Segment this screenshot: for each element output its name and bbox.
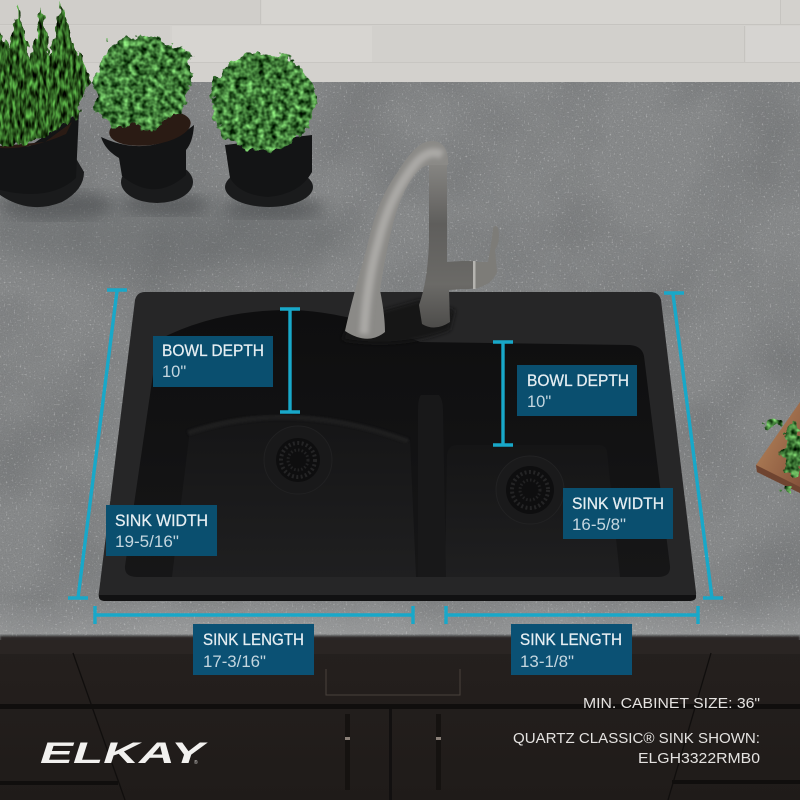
callout: right sink length: 13-1/8" (520, 653, 574, 671)
spout highlight (364, 153, 442, 334)
potted plant 3: round ivy (211, 53, 325, 218)
dimension: left bowl depth (280, 309, 300, 412)
callout: left sink length: SINK LENGTH (203, 631, 304, 649)
rosemary foliage (0, 2, 90, 146)
callout: left bowl depth: 10" (162, 363, 186, 381)
pot body (225, 135, 312, 197)
pot shadow (225, 198, 325, 218)
potted plant 2: herb (94, 34, 210, 215)
logo: Elkay: ® (194, 759, 198, 766)
logo: Elkay: ELKAY (40, 737, 209, 770)
right bowl floor (445, 445, 620, 577)
callout: right sink length: SINK LENGTH (520, 631, 622, 649)
faucet collar (473, 261, 476, 289)
ivy foliage (211, 53, 315, 151)
cabinet door handles (345, 714, 441, 790)
dimension: left sink length (95, 606, 413, 624)
soil (107, 105, 193, 151)
pot body (101, 125, 194, 189)
faucet body and neck (419, 155, 490, 328)
callout: right sink width: SINK WIDTH (572, 495, 664, 513)
note: product shown (513, 730, 760, 767)
note: product shown: QUARTZ CLASSIC® SINK SHOWN: (513, 730, 760, 747)
dimension: right sink length (446, 606, 698, 624)
callout: right bowl depth (517, 365, 637, 416)
logo: Elkay (40, 737, 209, 770)
pot shadow (120, 195, 210, 215)
left drain (264, 426, 332, 494)
callout: left bowl depth: BOWL DEPTH (162, 342, 264, 360)
dark cabinets (0, 640, 800, 800)
callout: left sink width: SINK WIDTH (115, 512, 208, 530)
callout: left bowl depth (153, 336, 273, 387)
wooden board with herbs (756, 402, 800, 493)
callout: right sink length (511, 624, 632, 675)
herb foliage (94, 34, 192, 130)
sink top deck (99, 292, 696, 601)
left bowl floor (172, 415, 416, 577)
note: product shown: ELGH3322RMB0 (638, 750, 760, 767)
callout: left sink width: 19-5/16" (115, 533, 179, 551)
callout: right bowl depth: 10" (527, 393, 551, 411)
dimension lines (68, 290, 723, 624)
faucet (345, 141, 499, 339)
callout: right sink width (563, 488, 673, 539)
pot body (0, 112, 79, 194)
wood floor background (0, 0, 800, 84)
callout: left sink length (193, 624, 314, 675)
callout: right sink width: 16-5/8" (572, 516, 626, 534)
faucet handle lever (474, 226, 499, 289)
callout: right bowl depth: BOWL DEPTH (527, 372, 629, 390)
icon: drawer pull handle (326, 669, 460, 695)
note: minimum cabinet size: MIN. CABINET SIZE: 36" (583, 695, 760, 712)
basin well (125, 310, 670, 577)
right drain (496, 456, 564, 524)
saucer (121, 161, 193, 203)
bowl divider (418, 395, 446, 577)
saucer (225, 167, 313, 207)
dimension: left sink width (68, 290, 127, 598)
saucer (0, 155, 84, 207)
sink (99, 292, 696, 601)
callout: left sink width (106, 505, 217, 556)
faucet shadow on deck (342, 300, 455, 343)
dimension: right bowl depth (493, 342, 513, 445)
soil (0, 122, 72, 148)
dimension: right sink width (664, 293, 723, 598)
faucet spout (345, 141, 448, 339)
callout: left sink length: 17-3/16" (203, 653, 266, 671)
potted plant 1: rosemary (0, 2, 115, 219)
grey stone countertop (0, 82, 800, 644)
pot shadow (0, 191, 115, 219)
